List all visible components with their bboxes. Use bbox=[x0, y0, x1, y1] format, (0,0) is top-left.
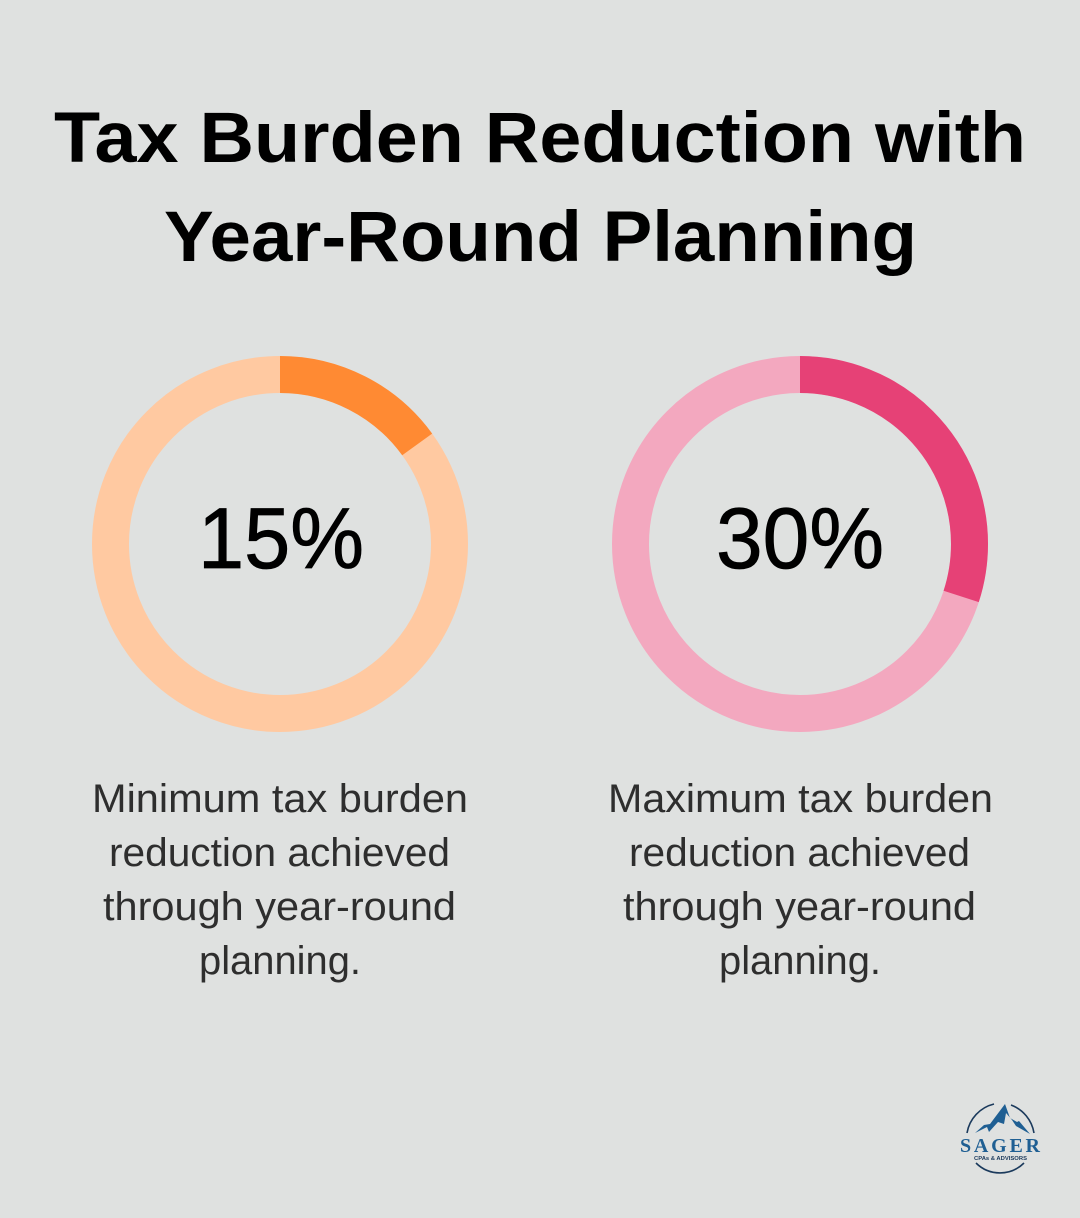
description: maximum: planning. bbox=[719, 939, 881, 983]
description: maximum: reduction achieved bbox=[629, 831, 970, 875]
logo wordmark: SAGER bbox=[960, 1135, 1041, 1157]
description: minimum: reduction achieved bbox=[109, 831, 450, 875]
title: Year-Round Planning bbox=[164, 198, 917, 277]
donut chart: 30% bbox=[630, 374, 970, 714]
title bbox=[54, 99, 1026, 277]
description: maximum bbox=[608, 777, 993, 983]
description: minimum: planning. bbox=[199, 939, 361, 983]
panel: maximum reduction bbox=[608, 374, 993, 983]
description: maximum: through year-round bbox=[623, 885, 976, 929]
value: 15%: 15% bbox=[198, 491, 364, 587]
logo tagline: CPAs & ADVISORS bbox=[974, 1156, 1028, 1162]
title: Tax Burden Reduction with bbox=[54, 99, 1026, 178]
value: 30%: 30% bbox=[716, 491, 884, 587]
logo: Sager CPAs & Advisors bbox=[960, 1104, 1041, 1173]
description: minimum bbox=[92, 777, 468, 983]
description: minimum: Minimum tax burden bbox=[92, 777, 468, 821]
logo ring bbox=[967, 1104, 1034, 1173]
icon: mountain bbox=[975, 1104, 1030, 1134]
description: maximum: Maximum tax burden bbox=[608, 777, 993, 821]
description: minimum: through year-round bbox=[103, 885, 456, 929]
panel: minimum reduction bbox=[92, 374, 468, 983]
donut chart: 15% bbox=[110, 374, 450, 714]
